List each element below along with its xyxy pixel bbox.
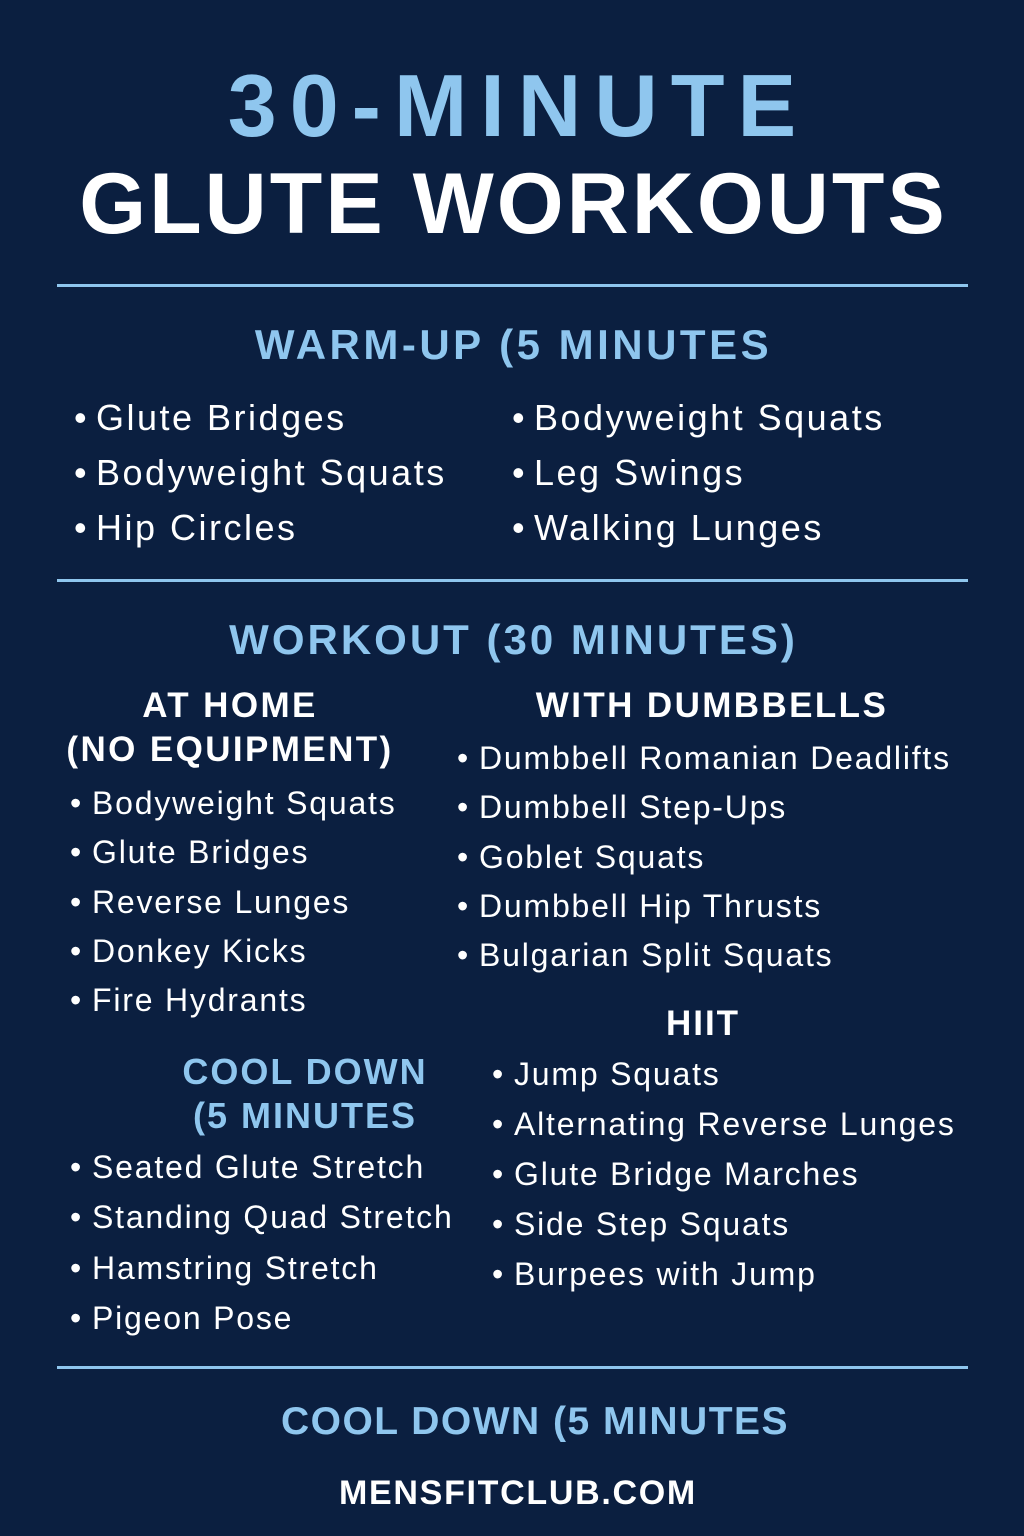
title: 30-MINUTE — [228, 56, 809, 155]
list: hiit: Alternating Reverse Lunges — [514, 1106, 956, 1142]
footer heading: COOL DOWN (5 MINUTES — [281, 1400, 789, 1443]
list: cool down: Seated Glute Stretch — [92, 1149, 425, 1185]
list: cool down: Pigeon Pose — [92, 1300, 293, 1336]
list: dumbbells: Bulgarian Split Squats — [479, 937, 833, 973]
subheading: at home: (NO EQUIPMENT) — [66, 730, 394, 769]
list: cool down: Standing Quad Stretch — [92, 1199, 454, 1235]
title — [79, 56, 948, 252]
list: hiit — [493, 1056, 956, 1292]
subheading: cool down: (5 MINUTES — [193, 1095, 417, 1136]
list: hiit: Burpees with Jump — [514, 1256, 817, 1292]
list: warm-up left: Bodyweight Squats — [96, 452, 447, 493]
list: dumbbells: Dumbbell Step-Ups — [479, 789, 787, 825]
list: cool down — [71, 1149, 454, 1336]
list: warm-up right: Leg Swings — [534, 452, 745, 493]
list: at home: Fire Hydrants — [92, 982, 307, 1018]
list: warm-up left: Hip Circles — [96, 507, 298, 548]
list: dumbbells — [458, 740, 951, 973]
list: warm-up left — [75, 397, 447, 548]
list: at home: Glute Bridges — [92, 834, 309, 870]
list: at home: Donkey Kicks — [92, 933, 307, 969]
list: cool down: Hamstring Stretch — [92, 1250, 379, 1286]
list: dumbbells: Dumbbell Hip Thrusts — [479, 888, 822, 924]
list: warm-up right: Bodyweight Squats — [534, 397, 885, 438]
footer site: MENSFITCLUB.COM — [339, 1474, 697, 1512]
subheading: cool down — [182, 1051, 428, 1136]
title: GLUTE WORKOUTS — [79, 156, 948, 252]
list: at home — [71, 785, 397, 1018]
list: hiit: Glute Bridge Marches — [514, 1156, 859, 1192]
list: dumbbells: Dumbbell Romanian Deadlifts — [479, 740, 951, 776]
heading: workout: WORKOUT (30 MINUTES) — [229, 616, 798, 663]
list: at home: Reverse Lunges — [92, 884, 350, 920]
list: warm-up right — [513, 397, 885, 548]
list: warm-up right: Walking Lunges — [534, 507, 824, 548]
list: hiit: Jump Squats — [514, 1056, 721, 1092]
list: hiit: Side Step Squats — [514, 1206, 790, 1242]
subheading: with dumbbells: WITH DUMBBELLS — [536, 686, 888, 725]
list: dumbbells: Goblet Squats — [479, 839, 705, 875]
subheading: at home: AT HOME — [142, 686, 318, 725]
subheading: cool down: COOL DOWN — [182, 1051, 428, 1092]
heading: warm-up: WARM-UP (5 MINUTES — [255, 321, 772, 368]
subheading: hiit: HIIT — [666, 1004, 740, 1043]
subheading: at home — [66, 686, 394, 769]
list: at home: Bodyweight Squats — [92, 785, 397, 821]
list: warm-up left: Glute Bridges — [96, 397, 347, 438]
